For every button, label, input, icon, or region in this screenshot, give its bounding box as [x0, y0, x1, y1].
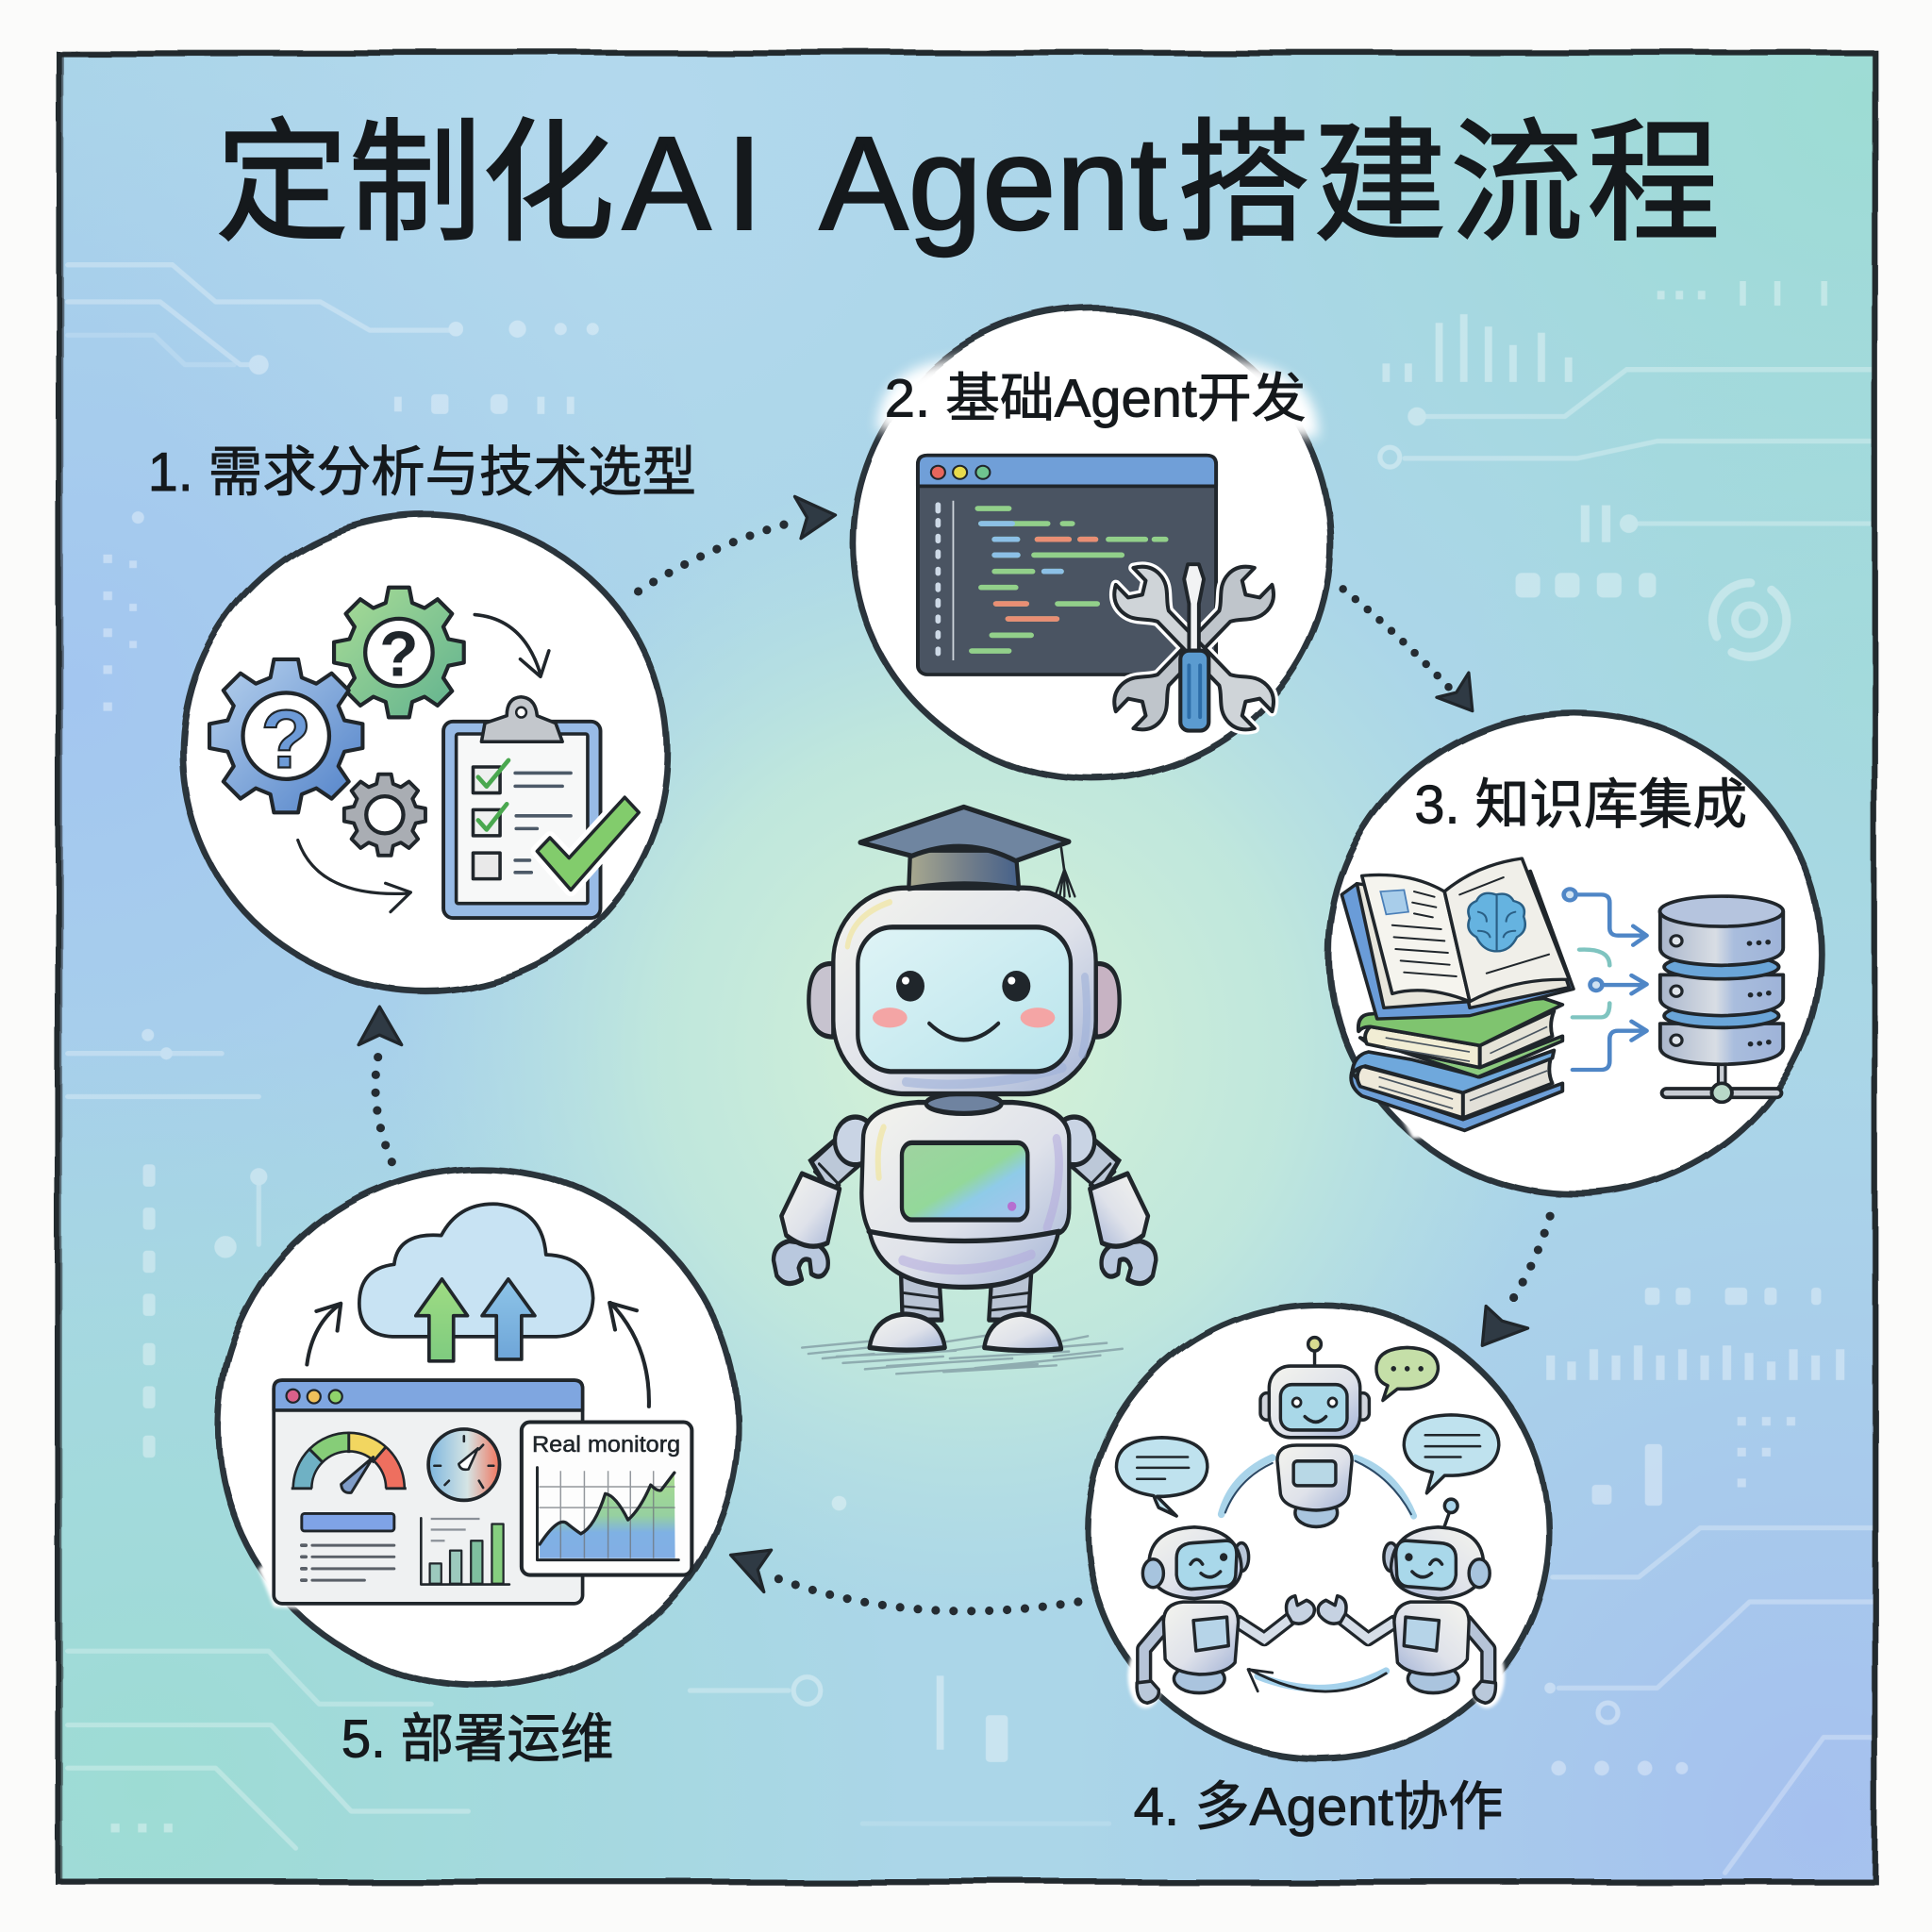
title: 定制化: [216, 108, 615, 258]
arrow: step 5 to step 1: [358, 1007, 402, 1162]
robot head: [808, 888, 1120, 1094]
icon: crossed wrenches and screwdriver: [1106, 558, 1282, 739]
speech bubble: green: [1376, 1347, 1438, 1400]
bar chart: [421, 1518, 509, 1585]
title: AI: [623, 108, 777, 258]
arrow: curve right: [609, 1303, 649, 1407]
icon: grey gear: [344, 774, 425, 856]
arrow: step 3 to step 4: [1482, 1216, 1550, 1345]
arrow: lower curve: [298, 841, 410, 912]
icon: green upload arrow: [416, 1279, 468, 1361]
panel: step 3 knowledge base integration: [1286, 665, 1864, 1241]
robot: top: [1260, 1338, 1369, 1526]
connectors: [1564, 889, 1647, 1070]
arrow: step 1 to step 2: [639, 496, 836, 591]
icons: books, connectors, database: [1339, 858, 1783, 1139]
icon: blue upload arrow: [482, 1279, 535, 1359]
step 3 circle: [1286, 665, 1864, 1241]
icons: gears and checklist: [209, 588, 639, 918]
title: Agent: [820, 108, 1167, 258]
icon: open book with brain: [1341, 858, 1574, 1019]
arc: left link: [1222, 1457, 1273, 1514]
robot legs and feet: [870, 1270, 1061, 1351]
blue bar and list: [302, 1513, 394, 1580]
icon: code editor window: [918, 456, 1216, 675]
step 4 circle: [1088, 1305, 1549, 1758]
icons: cloud and monitoring dashboard: [258, 1204, 691, 1610]
step 1 heading: 1. 需求分析与技术选型: [148, 442, 696, 503]
icon: cloud: [359, 1204, 593, 1337]
heading halo: [877, 346, 1319, 438]
step 4 heading: 4. 多Agent协作: [1134, 1776, 1503, 1836]
circuit board pattern: [68, 265, 1873, 1873]
robot arm right: [1054, 1117, 1156, 1284]
step 2 circle: [817, 268, 1366, 819]
robot torso: [861, 1093, 1069, 1287]
ground shadow: [802, 1335, 1123, 1374]
white patches around hands: [1127, 1644, 1505, 1708]
card label: Real monitorg: [532, 1432, 680, 1457]
title: 搭建流程: [1176, 108, 1724, 258]
icon: blue gear with question mark: [209, 659, 362, 812]
white patch behind books: [1339, 969, 1547, 1139]
step 1 circle: [154, 481, 696, 1024]
gauge: needle: [341, 1457, 374, 1492]
step 5 circle: [179, 1124, 777, 1729]
panel: step 2 basic agent development: [817, 268, 1366, 819]
dashboard window: [258, 1380, 583, 1610]
arc: right link: [1356, 1457, 1414, 1516]
icon: green gear with question mark: [334, 588, 464, 717]
gauge: semi circle: [291, 1432, 407, 1489]
robot: bottom right: [1318, 1499, 1495, 1703]
icon: green gear with question mark: ?: [379, 620, 419, 691]
arc: dark detail: [1225, 1461, 1411, 1514]
step 2 heading: 2. 基础Agent开发: [885, 368, 1306, 427]
icon: large green check: [537, 797, 639, 890]
icons: three collaborating robots: [1116, 1338, 1505, 1708]
heading halo: [1405, 770, 1756, 838]
icon: blue gear with question mark: ?: [260, 693, 311, 786]
panel: step 4 multi-agent collaboration: [1088, 1305, 1549, 1836]
panel: step 1 requirements analysis: [148, 442, 696, 1024]
area chart: [538, 1468, 678, 1560]
gauge: round dial: [428, 1429, 500, 1500]
icon: database server: [1659, 896, 1783, 1102]
robot arm left: [774, 1117, 875, 1284]
arrow: step 2 to step 3: [1343, 589, 1473, 711]
speech bubble: right: [1404, 1415, 1499, 1493]
code lines: [972, 508, 1166, 651]
arrow: curve left: [307, 1304, 341, 1364]
central robot with graduation cap: [774, 807, 1156, 1374]
step 5 heading: 5. 部署运维: [341, 1709, 613, 1769]
arrow: bottom return: [1248, 1670, 1386, 1691]
speech bubble: left: [1116, 1438, 1208, 1516]
robot: bottom left: [1137, 1527, 1314, 1703]
panel: step 5 deployment and operations: [179, 1124, 777, 1769]
arrow: gears to clipboard: [475, 615, 549, 676]
arrow: step 4 to step 5: [731, 1550, 1078, 1611]
icon: book stack: [1351, 998, 1562, 1130]
monitoring card: [522, 1423, 691, 1575]
step 3 heading: 3. 知识库集成: [1414, 774, 1747, 835]
graduation cap: [860, 807, 1074, 896]
icon: clipboard checklist: [443, 697, 601, 918]
